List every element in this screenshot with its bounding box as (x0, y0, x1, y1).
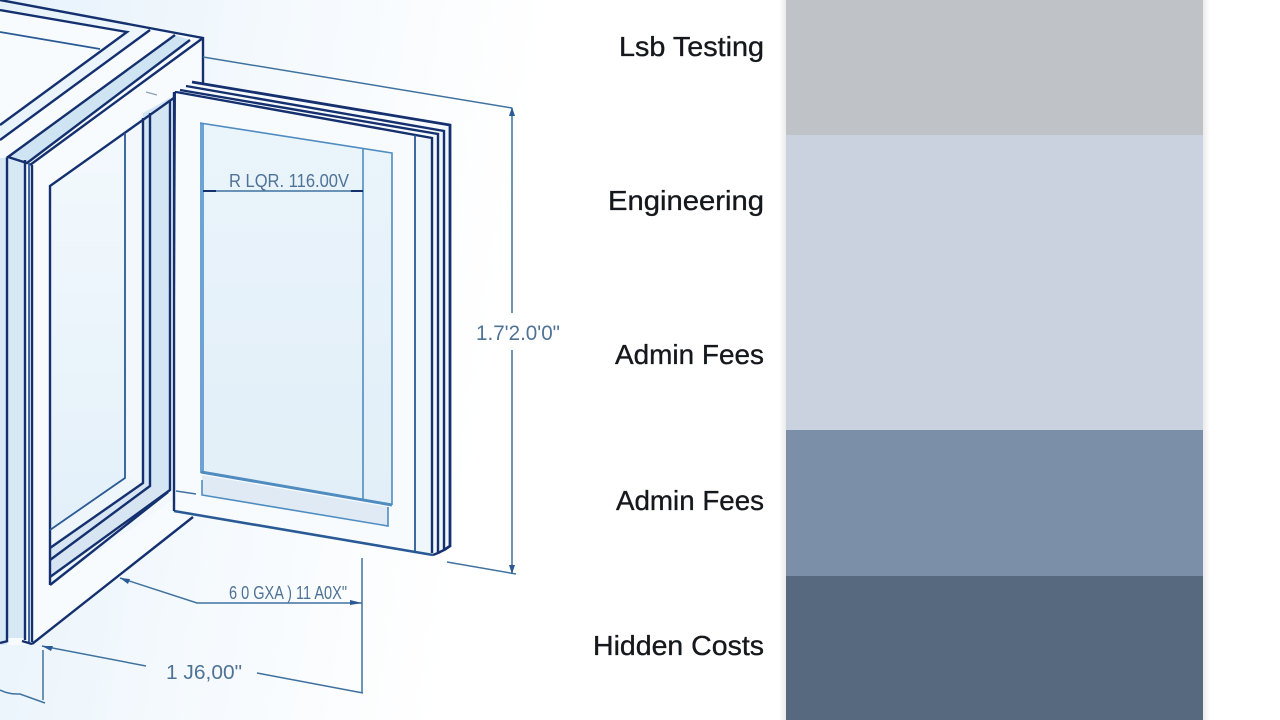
segment: lab testing (786, 0, 1203, 135)
door outlines (192, 82, 450, 550)
frame inner side pane (50, 133, 125, 530)
segment: engineering and admin fees (786, 135, 1203, 430)
bar left edge shadow (779, 0, 786, 720)
door glass pane (200, 123, 392, 505)
frame left side strips (0, 158, 7, 645)
dimension: lower width (120, 558, 362, 693)
stacked cost bar (779, 0, 1210, 720)
blueprint background (0, 0, 590, 720)
bar right edge shadow (1203, 0, 1210, 720)
dimension: overall height (203, 57, 560, 574)
bar labels (593, 31, 764, 661)
frame bottom sill (50, 483, 168, 577)
door lower sill (202, 475, 388, 526)
illustration: window frame technical drawing (0, 0, 450, 645)
dimension: lower width: 6 0 GXA ) 11 A0X" (229, 583, 347, 603)
frame top blue bevel (8, 35, 190, 163)
frame outlines (0, 0, 203, 644)
dimension: overall width: 1 J6,00" (166, 662, 242, 684)
label: lab testing: Lsb Testing (619, 31, 764, 62)
label: engineering: Engineering (608, 185, 764, 216)
segment: admin fees (786, 430, 1203, 576)
dimension: overall width (0, 646, 363, 703)
box interior top pane (0, 32, 100, 125)
dimension: overall height: 1.7'2.0'0" (476, 322, 560, 345)
label: hidden costs: Hidden Costs (593, 630, 764, 661)
label: admin fees upper: Admin Fees (615, 339, 764, 370)
box frame front face (0, 30, 203, 645)
door panel (174, 82, 450, 555)
dimension: pane width: R LQR. 116.00V (229, 171, 349, 191)
segment: hidden costs (786, 576, 1203, 720)
label: admin fees lower: Admin Fees (616, 485, 764, 516)
